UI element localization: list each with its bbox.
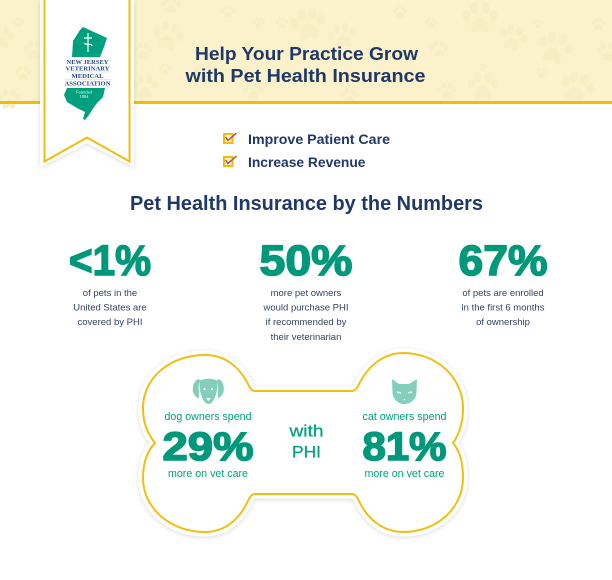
text: dog stat: 29% bbox=[162, 425, 254, 469]
stat: 50 percent: 50% bbox=[260, 237, 352, 285]
text: with PHI bbox=[288, 422, 324, 462]
stat: less than 1 percent: of pets in the bbox=[83, 288, 137, 299]
stat: 50 percent bbox=[260, 237, 352, 343]
stat: 50 percent: would purchase PHI bbox=[262, 302, 349, 314]
text: dog stat: more on vet care bbox=[168, 468, 248, 480]
stat: 67 percent: 67% bbox=[458, 237, 548, 285]
logo: New Jersey Veterinary Medical Association: Founded bbox=[76, 90, 93, 94]
logo: New Jersey Veterinary Medical Association: 1884 bbox=[80, 94, 89, 99]
benefits checklist bbox=[224, 131, 390, 170]
stat: 50 percent: if recommended by bbox=[266, 317, 347, 328]
text: improve patient care: Improve Patient Care bbox=[248, 131, 390, 147]
stat: 50 percent: their veterinarian bbox=[271, 332, 341, 343]
text: with PHI: with bbox=[288, 422, 324, 440]
stat: less than 1 percent bbox=[69, 237, 151, 328]
stat: less than 1 percent: covered by PHI bbox=[78, 317, 142, 328]
logo: New Jersey Veterinary Medical Association bbox=[64, 27, 111, 120]
ribbon badge with logo bbox=[40, 0, 134, 167]
icon: checkbox bbox=[224, 156, 236, 166]
text: cat stat: 81% bbox=[362, 425, 446, 469]
icon: dog bbox=[193, 379, 224, 404]
stat: less than 1 percent: United States are bbox=[73, 302, 147, 314]
text: dog stat: dog owners spend bbox=[164, 411, 252, 423]
logo: New Jersey Veterinary Medical Association: MEDICAL bbox=[72, 74, 104, 80]
text: cat stat: more on vet care bbox=[364, 468, 444, 480]
text: cat stat bbox=[362, 411, 446, 480]
logo: New Jersey Veterinary Medical Association: NEW JERSEY bbox=[66, 60, 109, 66]
stat: 50 percent: more pet owners bbox=[271, 288, 342, 299]
logo: New Jersey Veterinary Medical Association: ASSOCIATION bbox=[64, 82, 111, 88]
icon: checkbox bbox=[224, 133, 236, 143]
stat: 67 percent: in the first 6 months bbox=[462, 302, 545, 314]
stat: less than 1 percent: <1% bbox=[69, 237, 151, 285]
title: with Pet Health Insurance bbox=[184, 66, 426, 86]
title: Help Your Practice Grow bbox=[195, 44, 419, 64]
stat: 67 percent bbox=[458, 237, 548, 328]
text: increase revenue: Increase Revenue bbox=[248, 154, 366, 170]
title bbox=[184, 44, 426, 86]
text: cat stat: cat owners spend bbox=[362, 411, 446, 423]
icon: cat bbox=[392, 379, 417, 404]
stat: 67 percent: of ownership bbox=[476, 317, 530, 328]
header band bbox=[0, 0, 612, 109]
stat: 67 percent: of pets are enrolled bbox=[462, 288, 544, 299]
text: with PHI: PHI bbox=[292, 444, 321, 462]
logo: New Jersey Veterinary Medical Association: VETERINARY bbox=[66, 66, 110, 72]
bone panel bbox=[143, 353, 463, 532]
text: dog stat bbox=[162, 411, 254, 480]
section heading: Pet Health Insurance by the Numbers bbox=[130, 193, 483, 215]
